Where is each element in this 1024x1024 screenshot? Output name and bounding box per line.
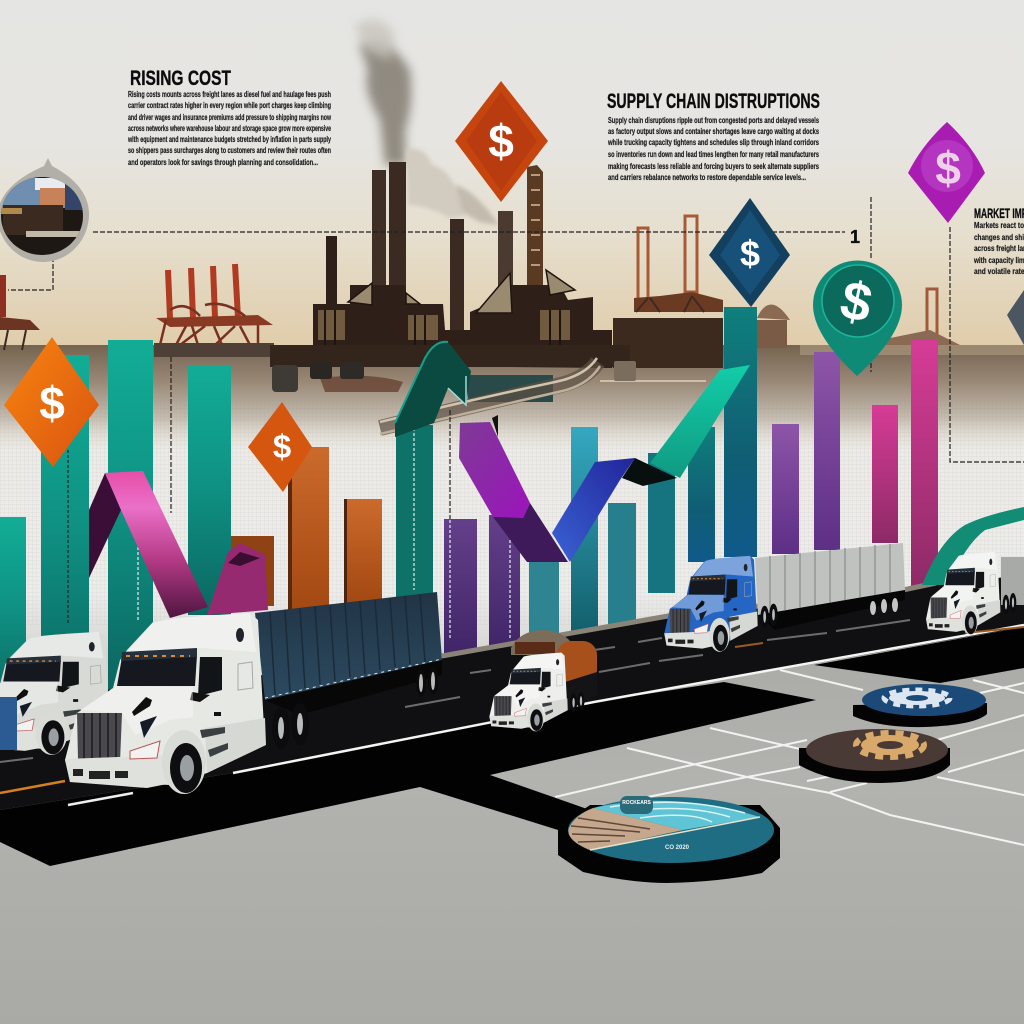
- smoke plumes: [355, 19, 499, 225]
- marker number 1: 1: [850, 227, 860, 247]
- photo badge: [0, 158, 89, 262]
- text block: supply chain disruptions: making forecasts less reliable and forcing buyers to seek alternate suppliers: [608, 162, 819, 171]
- pin: navy dollar: [709, 198, 790, 307]
- truck: blue with grey trailer: [664, 543, 905, 652]
- text block: rising cost: across networks where warehouse labour and storage space grow more expensive: [128, 124, 331, 133]
- curved access road and parked vehicles: [272, 358, 706, 434]
- pin: small orange dollar: $: [273, 428, 291, 465]
- road: [0, 575, 1024, 866]
- text block: rising cost: with equipment and maintenance budgets stretched by inflation in parts supply: [127, 135, 331, 144]
- pie chart disc: [558, 796, 780, 883]
- text block: rising cost: and operators look for savings through planning and consolidation...: [128, 158, 318, 167]
- text block: rising cost: carrier contract rates higher in every region while port charges keep climbing: [128, 101, 331, 110]
- pin: purple: [908, 122, 985, 223]
- pie label: top: [620, 796, 653, 814]
- pin: green dollar: $: [835, 270, 877, 334]
- port cranes: rust: [613, 216, 1024, 368]
- panel: supply chain disruptions: [607, 90, 820, 182]
- truck: large white with blue container: [65, 592, 442, 794]
- ribbon arrow: pink: [89, 471, 268, 618]
- cab: [65, 613, 309, 794]
- pin: green dollar: [813, 260, 902, 376]
- text block: supply chain disruptions: Supply chain disruptions ripple out from congested ports and delayed vessels: [608, 116, 819, 125]
- ribbon arrow: green: [395, 342, 471, 437]
- pie label: bottom: CO 2020: [665, 845, 690, 851]
- trailer wheels: [265, 660, 442, 715]
- blue cab: [664, 556, 778, 652]
- truck: white tanker: [489, 630, 597, 731]
- ground grid lines: [555, 670, 1024, 845]
- pie label: top: ROCKEARS: [622, 800, 651, 806]
- lane marking: orange: [0, 781, 65, 793]
- text block: supply chain disruptions: and carriers rebalance networks to restore dependable service levels...: [608, 173, 806, 182]
- truck: far right white: [922, 507, 1024, 635]
- port cranes: red: [0, 264, 274, 357]
- dashed leader lines: [8, 197, 1024, 520]
- pin: grey: [1007, 290, 1024, 345]
- pin: small orange dollar: [248, 402, 312, 492]
- heading: rising cost: RISING COST: [130, 67, 231, 90]
- trailer container: [255, 592, 442, 700]
- grey trailer: [755, 543, 905, 630]
- land and horizon: [0, 345, 1024, 450]
- panel: rising cost: [127, 67, 331, 167]
- text block: rising cost: and driver wages and insurance premiums add pressure to shipping margins now: [128, 113, 331, 122]
- pin: large orange dollar: [4, 337, 99, 467]
- pin: large orange dollar: $: [39, 377, 65, 429]
- truck: far left white: [0, 632, 141, 755]
- lane marking: orange accents: [735, 627, 1024, 647]
- bars: orange group: [231, 447, 382, 612]
- text block: rising cost: [127, 90, 331, 167]
- lane marking: main white line: [233, 625, 1024, 773]
- factory silhouette: [270, 162, 630, 368]
- bars: purple and pink group: [444, 340, 938, 659]
- lane marking: lower dash: [68, 793, 133, 805]
- ribbon arrow: purple and blue trend: [459, 365, 750, 562]
- halftone grid: [0, 395, 1024, 625]
- text block: rising cost: Rising costs mounts across freight lanes as diesel fuel and haulage fees push: [128, 90, 331, 99]
- text block: supply chain disruptions: while trucking capacity tightens and schedules slip through inland corridors: [607, 138, 819, 147]
- road verge: [442, 583, 936, 656]
- gear disc: brown: [799, 729, 950, 783]
- pin: purple: $: [935, 142, 961, 194]
- gear disc: blue: [853, 684, 987, 727]
- pin: red orange dollar: $: [488, 115, 514, 167]
- text block: supply chain disruptions: as factory output slows and container shortages leave cargo waiting at docks: [608, 127, 819, 136]
- pin: navy dollar: $: [740, 233, 760, 274]
- dotted bar guides: [68, 428, 510, 640]
- text block: rising cost: so shippers pass surcharges along to customers and review their routes often: [128, 146, 331, 155]
- text block: market: [973, 221, 1024, 276]
- pin: red orange dollar: [455, 81, 548, 202]
- text block: supply chain disruptions: so inventories run down and lead times lengthen for many retail manufacturers: [608, 150, 819, 159]
- bar chart: [0, 307, 938, 707]
- bars: teal group: [0, 307, 757, 707]
- text block: supply chain disruptions: [607, 116, 819, 182]
- heading: supply chain disruptions: SUPPLY CHAIN DISTRUPTIONS: [607, 90, 820, 113]
- ground: [0, 620, 1024, 1024]
- panel: market: [973, 205, 1024, 276]
- lane marking: centre dashes: [0, 620, 910, 762]
